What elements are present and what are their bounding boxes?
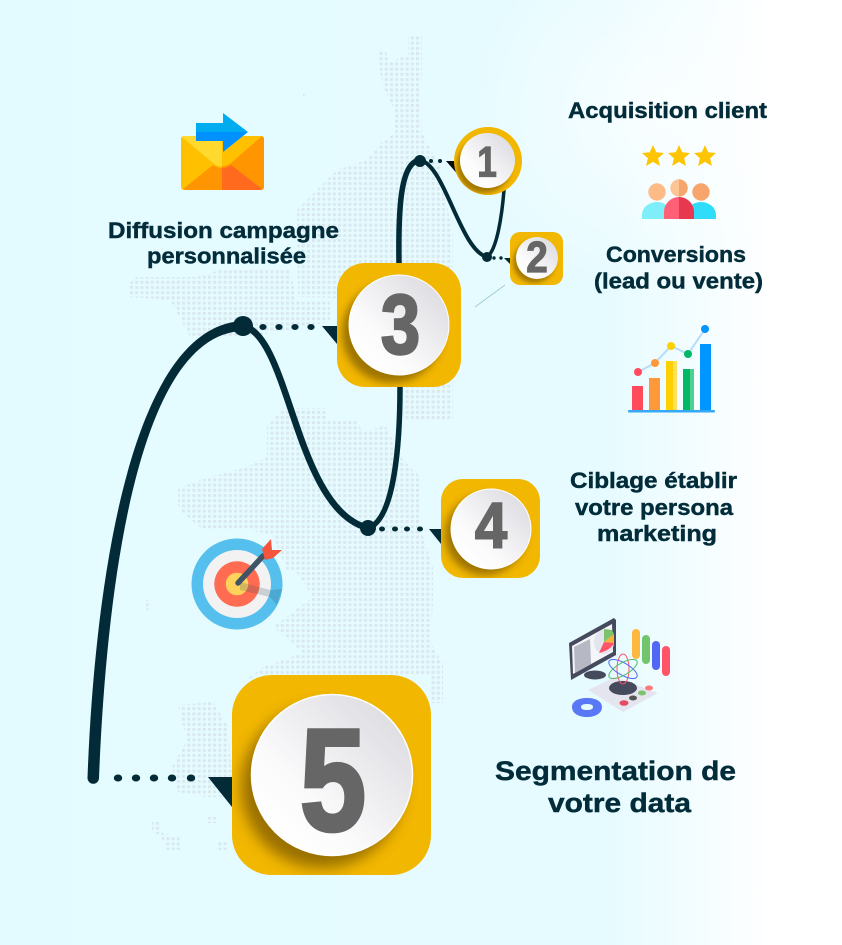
badge 4: 4	[475, 490, 507, 561]
badge 2	[510, 232, 563, 285]
heading: conversions: (lead ou vente)	[594, 268, 763, 294]
heading: diffusion campagne	[108, 218, 339, 268]
thin accent line	[475, 285, 505, 307]
icon: target with arrow	[192, 538, 282, 630]
heading: segmentation: Segmentation de	[495, 756, 736, 786]
heading: diffusion campagne: personnalisée	[147, 244, 306, 268]
badge 5	[232, 675, 431, 875]
dotted connectors	[114, 159, 511, 807]
icon: growth bar chart	[628, 325, 715, 412]
heading: ciblage	[570, 468, 737, 546]
journey curve	[88, 160, 504, 784]
icon: data analytics isometric	[569, 618, 670, 717]
badge 3	[337, 263, 461, 387]
heading: ciblage: Ciblage établir	[570, 468, 737, 493]
icon: people group	[642, 179, 716, 219]
icon: stars	[642, 145, 716, 166]
heading: ciblage: votre persona	[575, 495, 734, 520]
badge 4	[441, 479, 540, 578]
heading: conversions: Conversions	[606, 242, 746, 267]
heading: acquisition client: Acquisition client	[568, 98, 768, 123]
dotted world map	[130, 35, 453, 850]
badge 3: 3	[381, 279, 420, 372]
curve nodes	[233, 155, 492, 536]
badge 1: 1	[477, 138, 497, 186]
heading: conversions	[594, 242, 763, 294]
badge 2: 2	[526, 232, 548, 282]
heading: diffusion campagne: Diffusion campagne	[108, 218, 339, 243]
badge 1	[454, 127, 522, 195]
heading: ciblage: marketing	[597, 521, 717, 546]
heading: segmentation	[495, 756, 736, 818]
icon: envelope with arrow	[181, 113, 264, 190]
badge 5: 5	[300, 700, 366, 862]
heading: segmentation: votre data	[548, 788, 692, 818]
